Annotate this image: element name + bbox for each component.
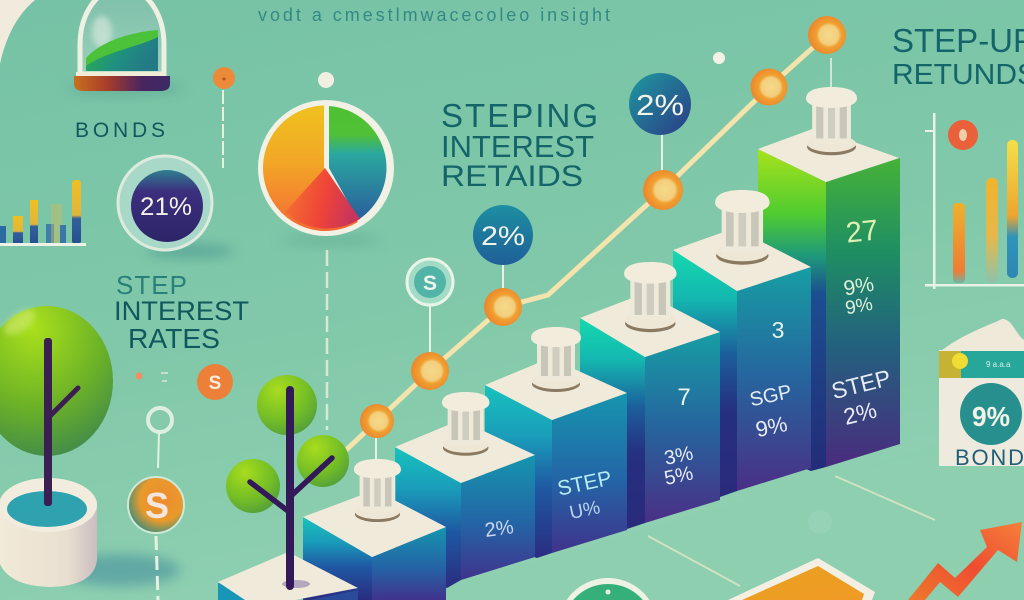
corner paper shape xyxy=(0,0,35,64)
red rising arrow xyxy=(908,522,1022,600)
heading: steping interest retaids xyxy=(441,97,598,193)
column text values: 9% xyxy=(753,411,790,442)
column text values: STEP xyxy=(555,467,614,501)
column text values: 9% xyxy=(844,294,874,319)
icon: S token: S xyxy=(145,485,169,526)
faint coin on floor xyxy=(808,510,832,534)
icon: S token xyxy=(128,477,184,533)
column text values: 9% xyxy=(842,273,876,301)
floor tint xyxy=(400,420,1024,600)
vertical dashed line xyxy=(326,250,328,430)
bonds card xyxy=(939,319,1024,470)
bottom green token xyxy=(567,578,649,600)
callout: 2 percent upper: 2% xyxy=(636,90,684,122)
column text values: 3 xyxy=(772,317,784,343)
column text values: SGP xyxy=(748,381,794,411)
heading: step-up returns xyxy=(892,22,1024,91)
bonds card: 9 a.a.a xyxy=(986,360,1011,369)
orange marker with dashed line xyxy=(213,67,235,168)
floor lines xyxy=(648,476,935,586)
column text values: 2% xyxy=(841,397,879,430)
label: step interest rates: STEP xyxy=(116,270,187,300)
pedestals xyxy=(354,87,857,522)
icon: orange dollar token xyxy=(197,364,233,400)
token: 21 percent xyxy=(118,156,234,258)
column 4 xyxy=(485,358,627,558)
big plant in pot xyxy=(0,304,180,587)
token: 21 percent: 21% xyxy=(140,193,192,221)
small tree xyxy=(226,375,349,588)
callout: 2 percent lower: 2% xyxy=(481,221,525,251)
column text values: 3% xyxy=(662,442,695,470)
heading: steping interest retaids: STEPING xyxy=(441,97,598,134)
left bar chart xyxy=(0,180,86,246)
white dot near top nodes xyxy=(713,52,725,64)
pie chart xyxy=(258,100,394,246)
callout: 2 percent lower xyxy=(473,205,533,265)
trend line with connectors xyxy=(345,35,831,460)
ring marker with dashed line xyxy=(148,408,172,600)
column 7 xyxy=(758,128,900,471)
column 3 xyxy=(395,420,535,588)
right bar chart xyxy=(925,113,1024,289)
column text values xyxy=(483,214,893,542)
column text values: U% xyxy=(568,497,602,524)
column 2 xyxy=(303,490,446,600)
top caption: vodt a cmestlmwacecoleo insight xyxy=(258,5,610,25)
white marker dot xyxy=(318,72,334,88)
label: step interest rates: INTEREST xyxy=(114,296,249,326)
label: bonds: BONDS xyxy=(75,119,165,142)
label: step interest rates xyxy=(114,270,249,354)
column text values: 5% xyxy=(662,462,695,490)
icon: percent coin: 9% xyxy=(972,401,1010,432)
column text values: 2% xyxy=(483,516,515,542)
column 1 xyxy=(218,552,358,600)
column text values: 27 xyxy=(844,214,880,250)
column text values: STEP xyxy=(829,364,893,404)
column text values: 7 xyxy=(677,384,691,411)
column 6 xyxy=(673,228,811,497)
callout: S token: S xyxy=(423,272,437,295)
icon: orange dollar token: S xyxy=(209,373,221,394)
heading: steping interest retaids: RETAIDS xyxy=(441,160,583,193)
small dots near rates xyxy=(136,372,168,382)
trend nodes xyxy=(360,16,846,438)
bottom orange card xyxy=(728,558,875,600)
bonds card: BOND xyxy=(955,445,1024,470)
column 5 xyxy=(580,293,720,529)
icon: percent coin xyxy=(960,383,1022,445)
heading: steping interest retaids: INTEREST xyxy=(441,129,594,164)
icon: bell jar xyxy=(67,0,183,95)
callout: S token xyxy=(407,259,453,305)
label: step interest rates: RATES xyxy=(128,323,220,354)
callout: 2 percent upper xyxy=(629,73,691,135)
